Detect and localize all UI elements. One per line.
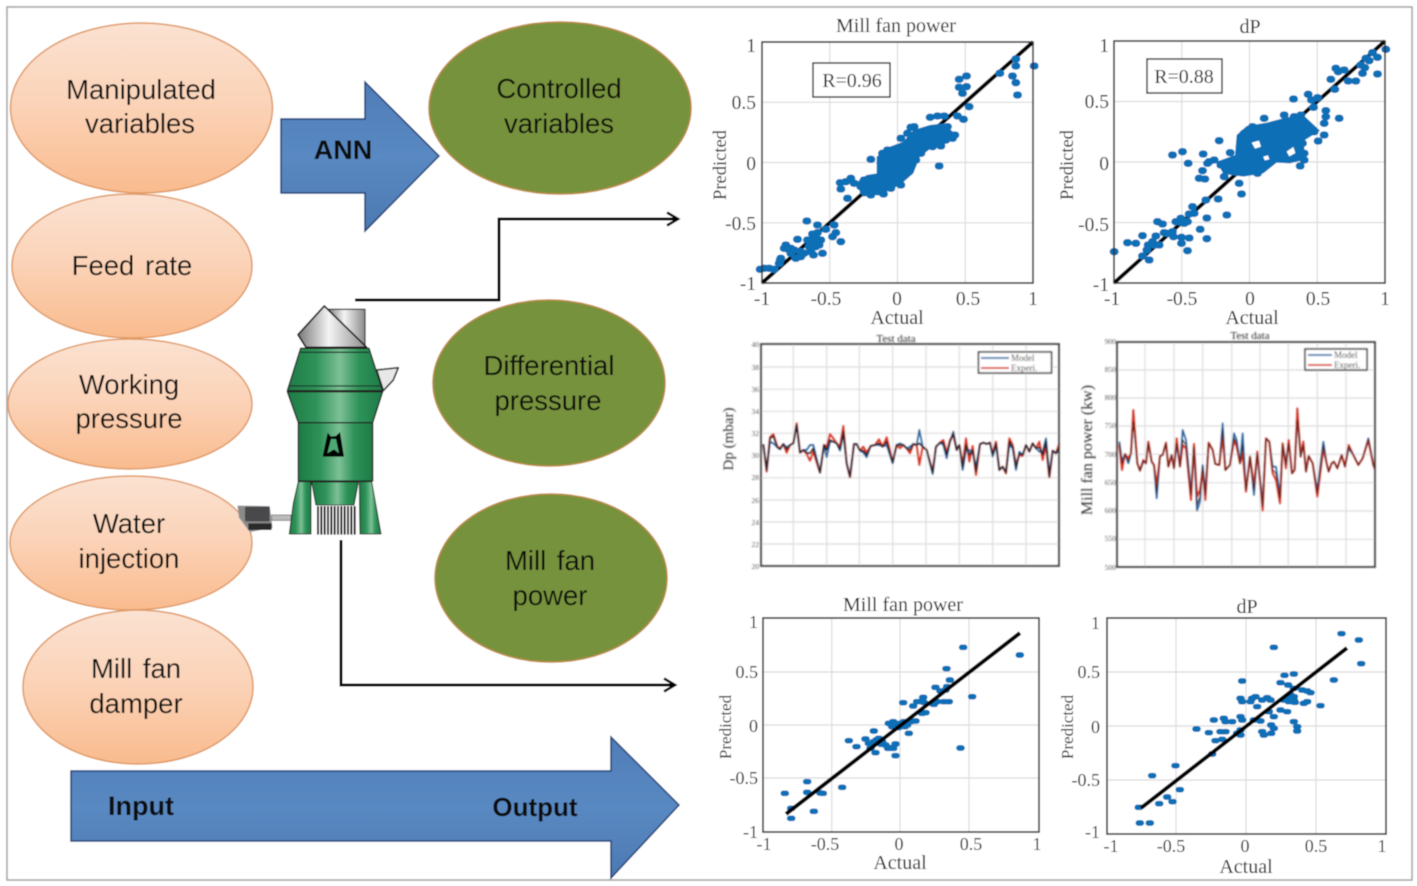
stat box R=0.88: R=0.88 — [1154, 66, 1214, 88]
chart: training scatter, mill fan power: 0 — [746, 154, 756, 175]
arrow: ANN — [281, 82, 439, 231]
oval: mill fan power — [435, 494, 667, 662]
chart: test data time series, Dp: 28 — [752, 473, 759, 482]
series: model — [1119, 408, 1375, 511]
chart: test scatter, mill fan power: -1 — [743, 822, 758, 842]
chart: training scatter, dP: 0.5 — [1085, 92, 1109, 113]
stat box R=0.88 — [1147, 59, 1222, 93]
series: experimental — [1119, 408, 1375, 511]
oval: mill fan power: power — [513, 580, 587, 611]
icon: vertical roller mill — [238, 306, 398, 535]
chart: test scatter, dP: Actual — [1219, 856, 1273, 878]
oval: working pressure: pressure — [76, 403, 182, 434]
oval: controlled variables: Controlled — [496, 73, 622, 104]
chart: training scatter, mill fan power: Mill fan power — [836, 15, 956, 37]
series: model — [763, 425, 1059, 477]
chart: test data time series, mill fan power: 750 — [1105, 421, 1116, 430]
chart: test data time series, mill fan power: 700 — [1105, 450, 1116, 459]
oval: working pressure: Working — [79, 369, 179, 400]
oval: differential pressure — [433, 300, 665, 466]
chart: training scatter, dP: 1 — [1380, 289, 1390, 310]
chart: test data time series, Dp: 26 — [752, 496, 759, 505]
legend: Experi. — [1011, 363, 1037, 373]
chart: training scatter, dP: 0 — [1245, 289, 1255, 310]
chart: training scatter, mill fan power — [711, 15, 1038, 329]
chart: training scatter, dP — [1058, 16, 1390, 329]
oval: working pressure — [8, 339, 252, 469]
legend — [978, 352, 1052, 373]
oval: manipulated variables: variables — [85, 108, 195, 139]
chart: test scatter, mill fan power: -0.5 — [811, 834, 839, 854]
chart: test data time series, mill fan power: 800 — [1105, 393, 1116, 402]
oval: water injection: Water — [93, 508, 165, 539]
chart: test scatter, mill fan power: 0.5 — [736, 662, 758, 682]
chart: test scatter, dP: 0.5 — [1305, 836, 1327, 856]
chart: test scatter, mill fan power: Mill fan power — [843, 594, 963, 616]
oval: differential pressure: pressure — [494, 385, 602, 416]
arrow: ANN: ANN — [314, 135, 372, 165]
oval: water injection: injection — [79, 543, 179, 574]
series: overlap — [763, 425, 1059, 477]
legend — [1305, 349, 1367, 370]
chart: test scatter, mill fan power: 1 — [749, 612, 758, 632]
chart: test data time series, mill fan power: Test data — [1230, 330, 1270, 342]
chart: training scatter, dP: 0 — [1099, 154, 1109, 175]
chart: test scatter, dP: -1 — [1104, 836, 1118, 856]
chart: test scatter, dP — [1058, 596, 1386, 878]
chart: test data time series, mill fan power: 650 — [1105, 478, 1116, 487]
chart: test data time series, mill fan power: 600 — [1105, 506, 1116, 515]
chart: test scatter, dP: -0.5 — [1157, 836, 1185, 856]
chart: training scatter, dP: Actual — [1225, 307, 1279, 329]
chart: training scatter, mill fan power: -1 — [740, 274, 756, 295]
chart: test scatter, dP: -1 — [1085, 822, 1100, 842]
chart: test data time series, Dp: 38 — [752, 363, 759, 372]
series: overlap — [1119, 420, 1375, 507]
chart: test data time series, Dp: 40 — [752, 340, 759, 349]
chart: test scatter, dP: Predicted — [1058, 694, 1077, 759]
legend: Model — [1334, 350, 1358, 360]
chart: test scatter, mill fan power: 0 — [749, 716, 758, 736]
stat box R=0.96: R=0.96 — [822, 70, 882, 92]
chart: test scatter, dP: 0.5 — [1078, 662, 1100, 682]
oval: mill fan damper: damper — [89, 688, 183, 719]
stat box R=0.96 — [813, 63, 890, 97]
chart: training scatter, dP: -1 — [1104, 289, 1120, 310]
chart: training scatter, mill fan power: -0.5 — [811, 289, 841, 310]
chart: test data time series, mill fan power: 500 — [1105, 563, 1116, 572]
chart: training scatter, mill fan power: 0 — [892, 289, 902, 310]
arrow: mill to training charts — [355, 219, 678, 300]
oval: mill fan power: Mill fan — [505, 545, 595, 576]
chart: test scatter, mill fan power: 0 — [894, 834, 904, 854]
oval: controlled variables: variables — [504, 108, 614, 139]
panel: controlled variable ovals — [429, 22, 691, 662]
chart: training scatter, mill fan power: Predicted — [711, 129, 731, 200]
chart: test scatter, dP: dP — [1236, 596, 1258, 618]
legend: Model — [1011, 353, 1035, 363]
chart: test scatter, dP: -0.5 — [1072, 770, 1100, 790]
chart: test scatter, mill fan power: -1 — [756, 834, 772, 854]
bottom arrow: input to output: Input — [108, 791, 174, 821]
chart: test data time series, Dp: Dp (mbar) — [721, 408, 737, 470]
arrow: mill to test charts — [341, 540, 675, 685]
chart: test scatter, mill fan power: -0.5 — [730, 768, 758, 788]
chart: training scatter, mill fan power: -0.5 — [725, 214, 756, 235]
chart: test data time series, mill fan power: 900 — [1105, 337, 1116, 346]
chart: training scatter, mill fan power: 1 — [746, 36, 756, 57]
series: experimental — [763, 423, 1059, 477]
oval: manipulated variables: Manipulated — [66, 74, 216, 105]
chart: training scatter, dP: Predicted — [1058, 129, 1078, 200]
chart: training scatter, dP: -0.5 — [1078, 215, 1109, 236]
chart: test data time series, Dp: 30 — [752, 451, 759, 460]
chart: test scatter, mill fan power: 1 — [1032, 834, 1042, 854]
chart: training scatter, mill fan power: -1 — [754, 289, 770, 310]
chart: training scatter, dP: -1 — [1093, 275, 1109, 296]
chart: training scatter, mill fan power: Actual — [870, 307, 924, 329]
bottom arrow: input to output: Output — [492, 792, 578, 822]
panel: input variable ovals — [8, 23, 272, 764]
oval: controlled variables — [429, 22, 691, 194]
chart: training scatter, dP: 0.5 — [1306, 289, 1330, 310]
oval: mill fan damper: Mill fan — [91, 653, 181, 684]
oval: water injection — [10, 476, 252, 610]
chart: training scatter, dP: dP — [1239, 16, 1261, 38]
bottom arrow: input to output — [71, 737, 679, 878]
oval: mill fan damper — [23, 610, 253, 764]
chart: test scatter, dP: 1 — [1091, 613, 1100, 633]
chart: test data time series, Dp: 34 — [752, 407, 759, 416]
chart: test data time series, mill fan power: Mill fan power (kw) — [1079, 385, 1096, 515]
oval: feed rate: Feed rate — [72, 250, 192, 281]
chart: test data time series, Dp: 22 — [752, 540, 759, 549]
chart: training scatter, mill fan power: 0.5 — [732, 93, 756, 114]
chart: test scatter, dP: 0 — [1091, 717, 1100, 737]
chart: test data time series, Dp — [721, 333, 1059, 571]
chart: test scatter, dP: 0 — [1240, 836, 1250, 856]
chart: training scatter, dP: -0.5 — [1167, 289, 1197, 310]
legend: Experi. — [1334, 360, 1360, 370]
chart: test data time series, mill fan power: 850 — [1105, 365, 1116, 374]
chart: test data time series, Dp: 20 — [752, 562, 759, 571]
chart: test data time series, Dp: 24 — [752, 518, 759, 527]
chart: test scatter, mill fan power: Actual — [873, 852, 927, 874]
chart: training scatter, dP: 1 — [1099, 36, 1109, 57]
chart: test data time series, Dp: Test data — [876, 333, 916, 345]
oval: manipulated variables — [10, 23, 272, 193]
chart: test scatter, dP: 1 — [1378, 836, 1386, 856]
chart: training scatter, mill fan power: 1 — [1028, 289, 1038, 310]
oval: differential pressure: Differential — [484, 350, 614, 381]
chart: test data time series, Dp: 36 — [752, 385, 759, 394]
chart: test data time series, Dp: 32 — [752, 429, 759, 438]
chart: training scatter, mill fan power: 0.5 — [956, 289, 980, 310]
chart: test scatter, mill fan power — [716, 594, 1042, 874]
chart: test data time series, mill fan power: 550 — [1105, 534, 1116, 543]
chart: test scatter, mill fan power: Predicted — [716, 694, 735, 759]
chart: test scatter, mill fan power: 0.5 — [960, 834, 982, 854]
oval: feed rate — [12, 194, 252, 338]
chart: test data time series, mill fan power — [1079, 330, 1375, 572]
